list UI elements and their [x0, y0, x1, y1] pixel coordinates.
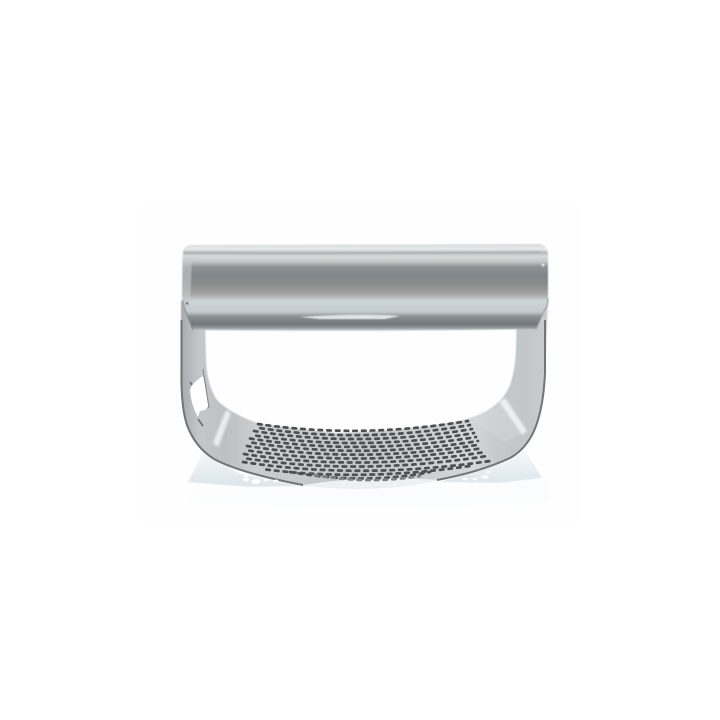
bottle opener cutout — [190, 369, 209, 426]
handle left shading — [182, 258, 192, 305]
blade outer edge — [181, 320, 303, 485]
curved blade body — [181, 300, 548, 488]
tube handle — [182, 244, 548, 331]
small holes: left foot — [243, 475, 278, 484]
handle brushed streaks — [184, 252, 540, 253]
faint photo background panel — [140, 206, 582, 522]
blade bottom highlight — [303, 478, 437, 488]
small holes: right foot — [462, 471, 490, 480]
fold highlights — [213, 410, 231, 447]
cast shadow under blade — [188, 450, 548, 505]
perforated grating — [243, 421, 490, 480]
